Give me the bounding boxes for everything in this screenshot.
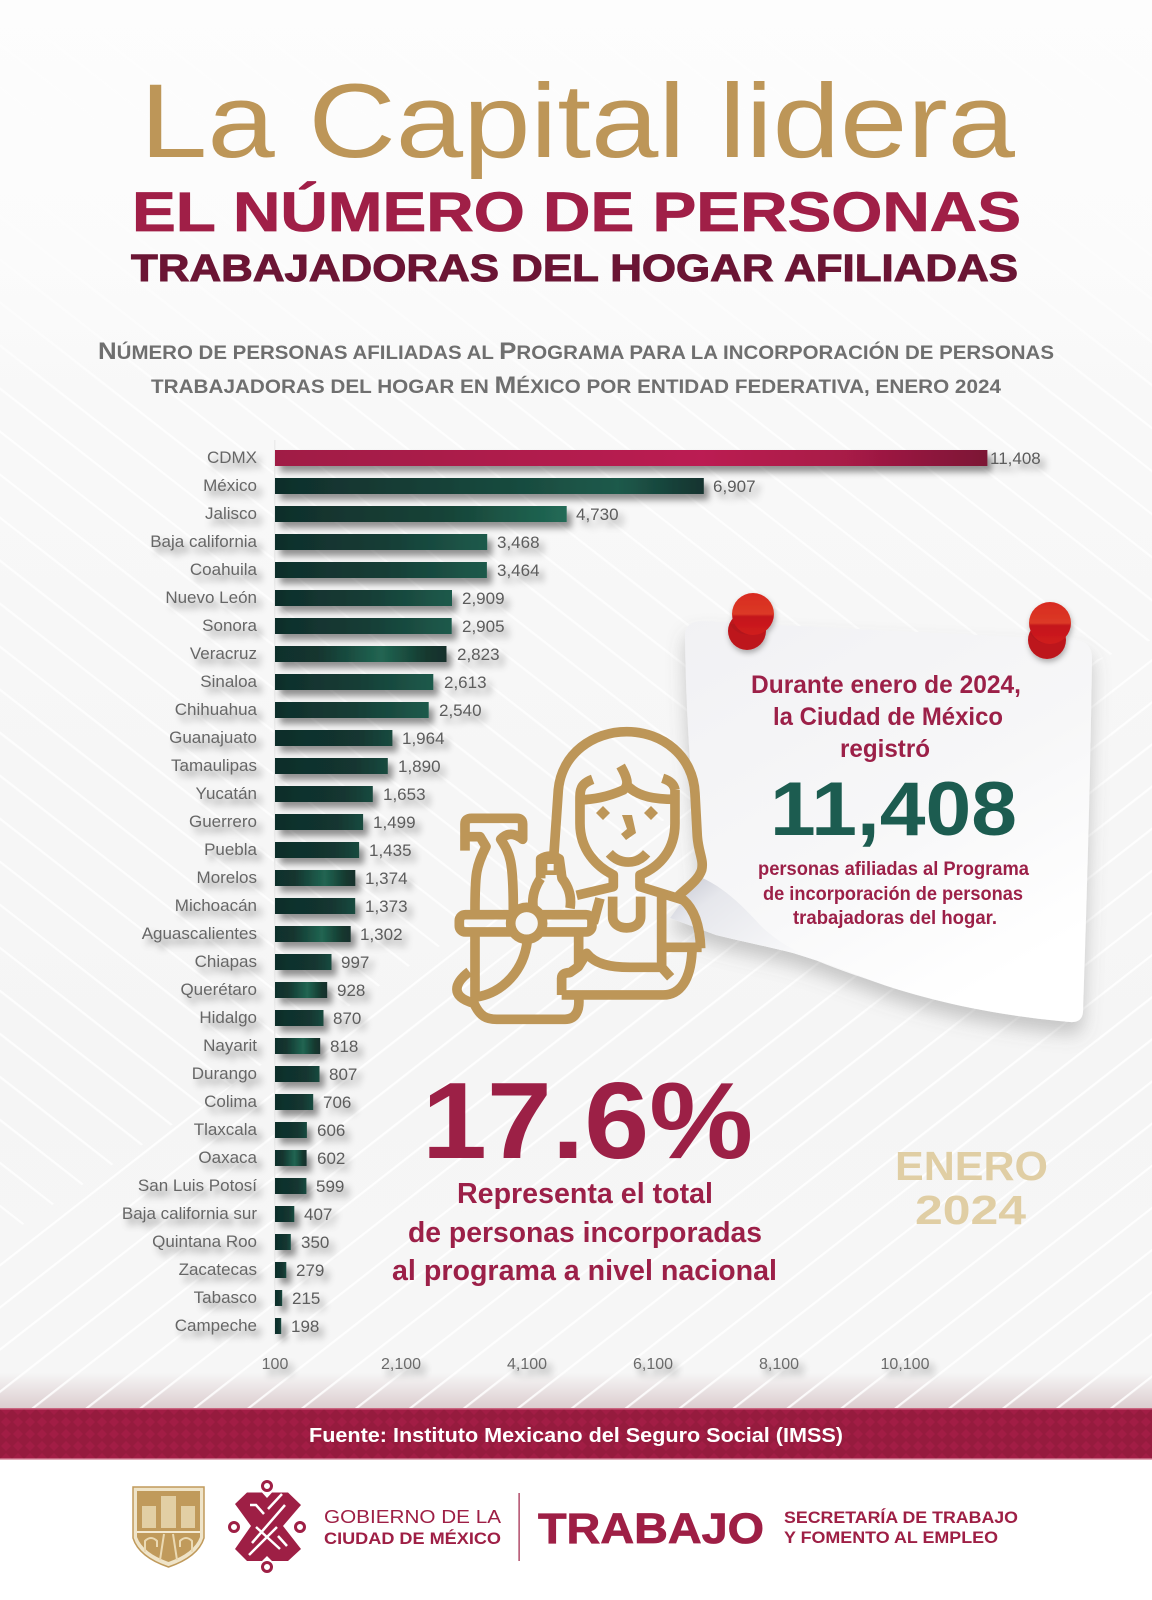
logo text: Gobierno de la Ciudad de México: GOBIERNO DE LA [324,1507,501,1527]
row: San Luis Potosí [138,1176,344,1196]
row: Tlaxcala [194,1120,345,1140]
row: Yucatán: 1,653 [383,785,426,804]
logo text: Secretaría de Trabajo y Fomento al Empleo [784,1508,1018,1547]
icon details: eyes and nose [596,806,658,840]
row: Durango: Durango [192,1064,257,1083]
row: Quintana Roo [152,1232,329,1252]
row: Campeche: 198 [291,1317,319,1336]
logo text: Secretaría de Trabajo y Fomento al Empleo: SECRETARÍA DE TRABAJO [784,1508,1018,1527]
row: Guanajuato: Guanajuato [169,728,257,747]
row: Zacatecas: 279 [296,1261,324,1280]
icon: domestic worker with cleaning products [457,732,702,1019]
row: Sinaloa: 2,613 [444,673,487,692]
row: Baja california sur: Baja california sur [122,1204,257,1223]
row: México [203,476,756,496]
subtitle [98,338,1054,399]
pin: left [728,593,774,650]
row: Morelos [197,868,408,888]
logo text: Secretaría de Trabajo y Fomento al Empleo: Y FOMENTO AL EMPLEO [784,1528,998,1547]
note text: intro: Durante enero de 2024, [751,671,1021,699]
row: Chihuahua: Chihuahua [175,700,258,719]
axis labels: 10,100 [881,1356,930,1373]
row: Baja california sur [122,1204,332,1224]
row: Hidalgo [199,1008,361,1028]
axis labels [262,1356,930,1373]
row: Colima [204,1092,351,1112]
row: Durango: 807 [329,1065,357,1084]
row: Aguascalientes: Aguascalientes [142,924,257,943]
row: Tlaxcala: 606 [317,1121,345,1140]
row: Nuevo León [165,588,505,608]
source text: Fuente: Instituto Mexicano del Seguro Social (IMSS) [309,1425,843,1447]
row: Guerrero: Guerrero [189,812,257,831]
date label: 2024 [915,1187,1026,1233]
note text: description: personas afiliadas al Programa [758,859,1029,880]
row: Tabasco: 215 [292,1289,320,1308]
row: Baja california sur: 407 [304,1205,332,1224]
row: México: México [203,476,257,495]
note text: intro: registró [840,735,930,763]
row: Guerrero: 1,499 [373,813,416,832]
stat: 17.6%: 17.6% [422,1060,753,1182]
row: Veracruz: 2,823 [457,645,500,664]
row: México: 6,907 [713,477,756,496]
row: Chihuahua [175,700,482,720]
row: Morelos: Morelos [197,868,257,887]
row: Durango [192,1064,357,1084]
heading: trabajadoras del hogar afiliadas: TRABAJADORAS DEL HOGAR AFILIADAS [131,248,1018,290]
row: San Luis Potosí: San Luis Potosí [138,1176,257,1195]
row: Puebla: 1,435 [369,841,412,860]
row: Coahuila [190,560,540,580]
logo text: Trabajo: TRABAJO [538,1505,764,1553]
pin: right [1028,602,1071,659]
note number: 11,408: 11,408 [770,767,1017,852]
row: Querétaro [180,980,365,1000]
row: Tlaxcala: Tlaxcala [194,1120,258,1139]
row: Guanajuato [169,728,445,748]
row: Querétaro: 928 [337,981,365,1000]
row: Aguascalientes: 1,302 [360,925,403,944]
row: Tamaulipas: 1,890 [398,757,441,776]
row: Querétaro: Querétaro [180,980,257,999]
footer background [0,1460,1152,1600]
row: Nuevo León: 2,909 [462,589,505,608]
row: Oaxaca: 602 [317,1149,345,1168]
axis labels: 4,100 [507,1356,547,1373]
row: Michoacán [175,896,408,916]
row: Jalisco: 4,730 [576,505,619,524]
note text: description: trabajadoras del hogar. [793,908,997,929]
row: Puebla: Puebla [204,840,258,859]
row: Chiapas: Chiapas [195,952,257,971]
panel: pinned note [670,593,1092,1022]
row: Chiapas [195,952,369,972]
row: Guerrero [189,812,416,832]
row: Colima: Colima [204,1092,258,1111]
row: Sinaloa [200,672,487,692]
row: Yucatán: Yucatán [196,784,257,803]
logo: coat of arms shield [133,1487,204,1567]
row: Campeche: Campeche [175,1316,257,1335]
axis labels: 6,100 [633,1356,673,1373]
row: Tamaulipas: Tamaulipas [171,756,257,775]
row: Sonora: 2,905 [462,617,505,636]
row: CDMX: 11,408 [990,449,1041,468]
note text: description [758,859,1029,929]
axis labels: 8,100 [759,1356,799,1373]
axis line [274,440,276,1335]
row: Nayarit: 818 [330,1037,358,1056]
row: Jalisco [205,504,619,524]
source band [0,1408,1152,1460]
row: Chihuahua: 2,540 [439,701,482,720]
row: CDMX [207,448,1041,468]
row: Sonora: Sonora [202,616,258,635]
row: Hidalgo: Hidalgo [199,1008,257,1027]
logo divider [518,1493,520,1561]
row: Nayarit [203,1036,358,1056]
row: Coahuila: Coahuila [190,560,258,579]
stat description [392,1178,777,1287]
row: Sonora [202,616,505,636]
title: La Capital lidera: La Capital lidera [140,63,1016,180]
note text: intro: la Ciudad de México [773,703,1003,731]
row: Morelos: 1,374 [365,869,408,888]
row: Tamaulipas [171,756,441,776]
row: Nayarit: Nayarit [203,1036,257,1055]
row: Yucatán [196,784,426,804]
subtitle: NÚMERO DE PERSONAS AFILIADAS AL PROGRAMA PARA LA INCORPORACIÓN DE PERSONAS [98,338,1054,365]
row: CDMX: CDMX [207,448,257,467]
row: Guanajuato: 1,964 [402,729,445,748]
note paper [670,621,1092,1022]
row: Veracruz: Veracruz [190,644,257,663]
row: Hidalgo: 870 [333,1009,361,1028]
row: Puebla [204,840,412,860]
row: Quintana Roo: 350 [301,1233,329,1252]
row: Michoacán: Michoacán [175,896,257,915]
row: Zacatecas: Zacatecas [179,1260,257,1279]
row: San Luis Potosí: 599 [316,1177,344,1196]
axis labels: 2,100 [381,1356,421,1373]
row: Campeche [175,1316,319,1336]
bar chart: personas afiliadas por entidad [122,440,1041,1373]
axis labels: 100 [262,1356,288,1373]
row: Oaxaca: Oaxaca [198,1148,258,1167]
row: Zacatecas [179,1260,324,1280]
row: Nuevo León: Nuevo León [165,588,257,607]
logo text: Gobierno de la Ciudad de México: CIUDAD DE MÉXICO [324,1529,501,1548]
row: Tabasco [194,1288,320,1308]
row: Baja california [150,532,540,552]
heading: el número de personas: EL NÚMERO DE PERSONAS [132,180,1021,243]
row: Colima: 706 [323,1093,351,1112]
date label [895,1143,1048,1233]
logo text: Gobierno de la Ciudad de México [324,1507,501,1548]
row: Aguascalientes [142,924,403,944]
row: Baja california: Baja california [150,532,258,551]
row: Oaxaca [198,1148,345,1168]
row: Baja california: 3,468 [497,533,540,552]
row: Tabasco: Tabasco [194,1288,257,1307]
logo: Ciudad de México knot symbol [230,1482,304,1572]
stat description: al programa a nivel nacional [392,1255,777,1287]
subtitle: TRABAJADORAS DEL HOGAR EN MÉXICO POR ENTIDAD FEDERATIVA, ENERO 2024 [151,372,1001,399]
row: Jalisco: Jalisco [205,504,257,523]
page curl [670,877,890,987]
stat description: de personas incorporadas [408,1217,762,1249]
row: Veracruz [190,644,500,664]
stat description: Representa el total [457,1178,713,1210]
note text: description: de incorporación de personas [763,884,1023,905]
row: Chiapas: 997 [341,953,369,972]
row: Sinaloa: Sinaloa [200,672,258,691]
note text: intro [751,671,1021,763]
date label: ENERO [895,1143,1048,1189]
row: Coahuila: 3,464 [497,561,540,580]
row: Michoacán: 1,373 [365,897,408,916]
row: Quintana Roo: Quintana Roo [152,1232,257,1251]
